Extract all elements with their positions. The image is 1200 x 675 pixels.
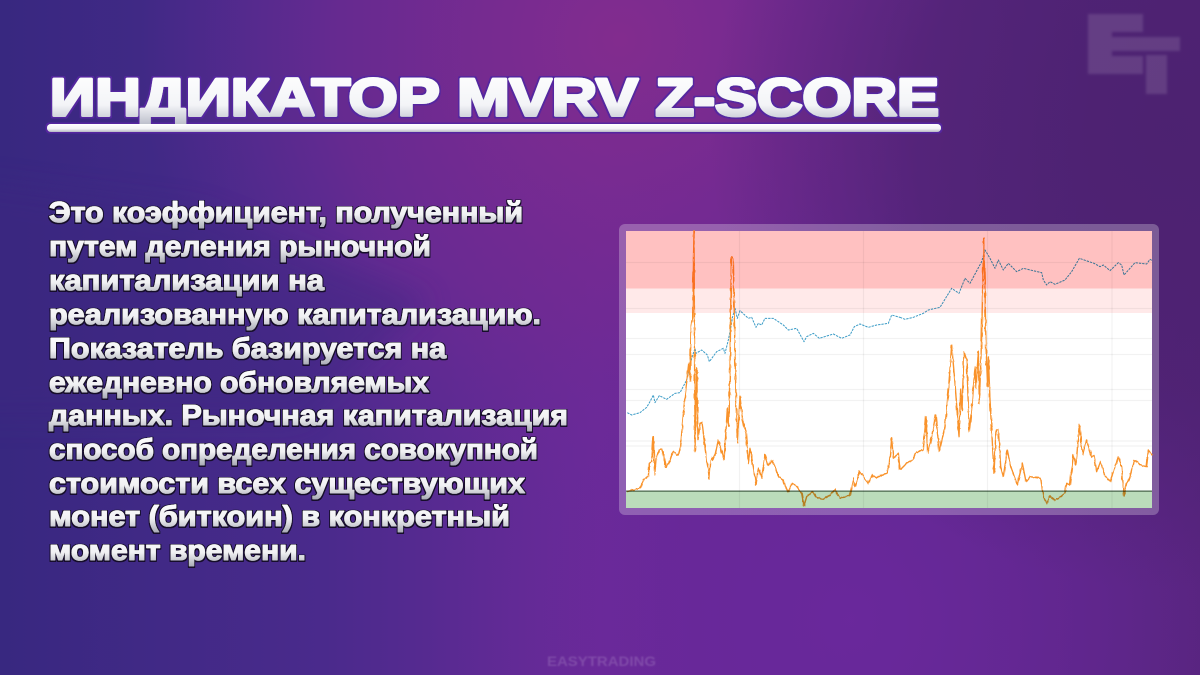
body text: стоимости всех существующих: [49, 468, 525, 500]
body text: монет (биткоин) в конкретный: [49, 501, 510, 533]
blue price line: [627, 250, 1152, 415]
body text: Показатель базируется на: [49, 333, 447, 365]
body text: [49, 197, 568, 567]
logo watermark: [1088, 14, 1180, 94]
footer watermark: EASYTRADING: [547, 654, 656, 669]
body text: реализованную капитализацию.: [49, 299, 541, 331]
body text: капитализации на: [49, 265, 325, 297]
chart zones: [626, 231, 1152, 508]
panel: chart: [619, 224, 1159, 515]
body text: данных. Рыночная капитализация: [49, 400, 568, 432]
body text: Это коэффициент, полученный: [49, 197, 523, 229]
body text: путем деления рыночной: [49, 231, 431, 263]
body text: момент времени.: [49, 535, 306, 567]
orange z-score line: [627, 231, 1152, 506]
body text: способ определения совокупной: [49, 434, 538, 466]
title: ИНДИКАТОР MVRV Z-SCORE: [50, 68, 939, 128]
body text: ежедневно обновляемых: [49, 367, 429, 399]
